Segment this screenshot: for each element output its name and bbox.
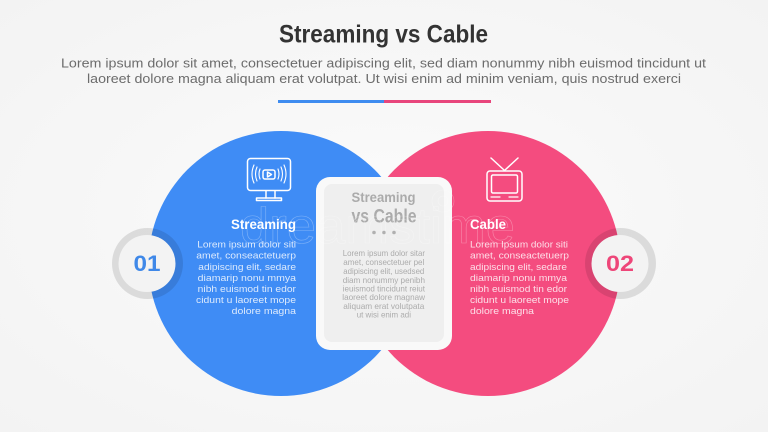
text block: cable: cidunt u laoreet mope: [470, 294, 569, 305]
title: Streaming vs Cable: [279, 20, 488, 48]
card text block: ut wisi enim adi: [357, 310, 411, 320]
description text: Lorem ipsum dolor sit amet, consectetuer adipiscing elit, sed diam nonummy nibh euismod tincidunt ut: [61, 56, 706, 70]
card text block: amet, consectetuer pel: [343, 257, 424, 267]
watermark: dreamstime: [240, 198, 515, 254]
card heading: Streaming: [352, 189, 416, 205]
text block: cable: dolore magna: [470, 305, 535, 316]
card text block: laoreet dolore magnaw: [342, 292, 426, 302]
two-colour divider: [278, 100, 491, 103]
text block: cable: adipiscing elit, sedare: [470, 261, 567, 272]
text block: streaming: Lorem ipsum dolor siti: [197, 238, 296, 250]
text block: cable: nibh euismod tin edor: [470, 283, 567, 294]
text block: cable: diamarip nonu mmya: [470, 272, 568, 283]
badge 02: [585, 228, 656, 299]
card text block: Lorem ipsum dolor sitar: [343, 248, 425, 258]
text block: streaming: dolore magna: [232, 305, 297, 316]
card text block: diam nonummy penibh: [343, 275, 425, 285]
panel: comparison card: [316, 177, 452, 350]
heading: streaming: Streaming: [231, 217, 296, 232]
card dots: [372, 231, 396, 234]
text block: streaming: nibh euismod tin edor: [198, 283, 296, 294]
text block: cable: amet, conseactetuerp: [470, 250, 569, 260]
badge 02: 02: [606, 251, 634, 276]
description text: [61, 56, 706, 86]
card text block: ieuismod tincidunt reiut: [343, 284, 426, 294]
icon: streaming monitor: [248, 158, 290, 200]
circle: streaming: [148, 131, 414, 396]
card text block: adipiscing elit, usedsed: [343, 266, 425, 276]
badge 01: 01: [134, 251, 160, 276]
badge 01: [112, 228, 183, 299]
card text block: [342, 248, 426, 320]
description text: laoreet dolore magna aliquam erat volutpat. Ut wisi enim ad minim veniam, quis nostrud exerci: [87, 71, 681, 86]
card heading: [352, 189, 416, 228]
text block: streaming: cidunt u laoreet mope: [196, 294, 296, 305]
text block: streaming: [196, 238, 297, 316]
circle: cable: [356, 131, 620, 396]
text block: streaming: adipiscing elit, sedare: [198, 261, 296, 272]
text block: streaming: diamarip nonu mmya: [198, 272, 297, 283]
card text block: aliquam erat volutpata: [343, 301, 425, 311]
text block: cable: [470, 238, 569, 316]
card heading: vs Cable: [352, 206, 416, 228]
heading: cable: Cable: [470, 217, 506, 232]
icon: television: [487, 158, 522, 201]
text block: cable: Lorem Ipsum dolor siti: [470, 238, 568, 250]
text block: streaming: amet, conseactetuerp: [196, 250, 296, 260]
